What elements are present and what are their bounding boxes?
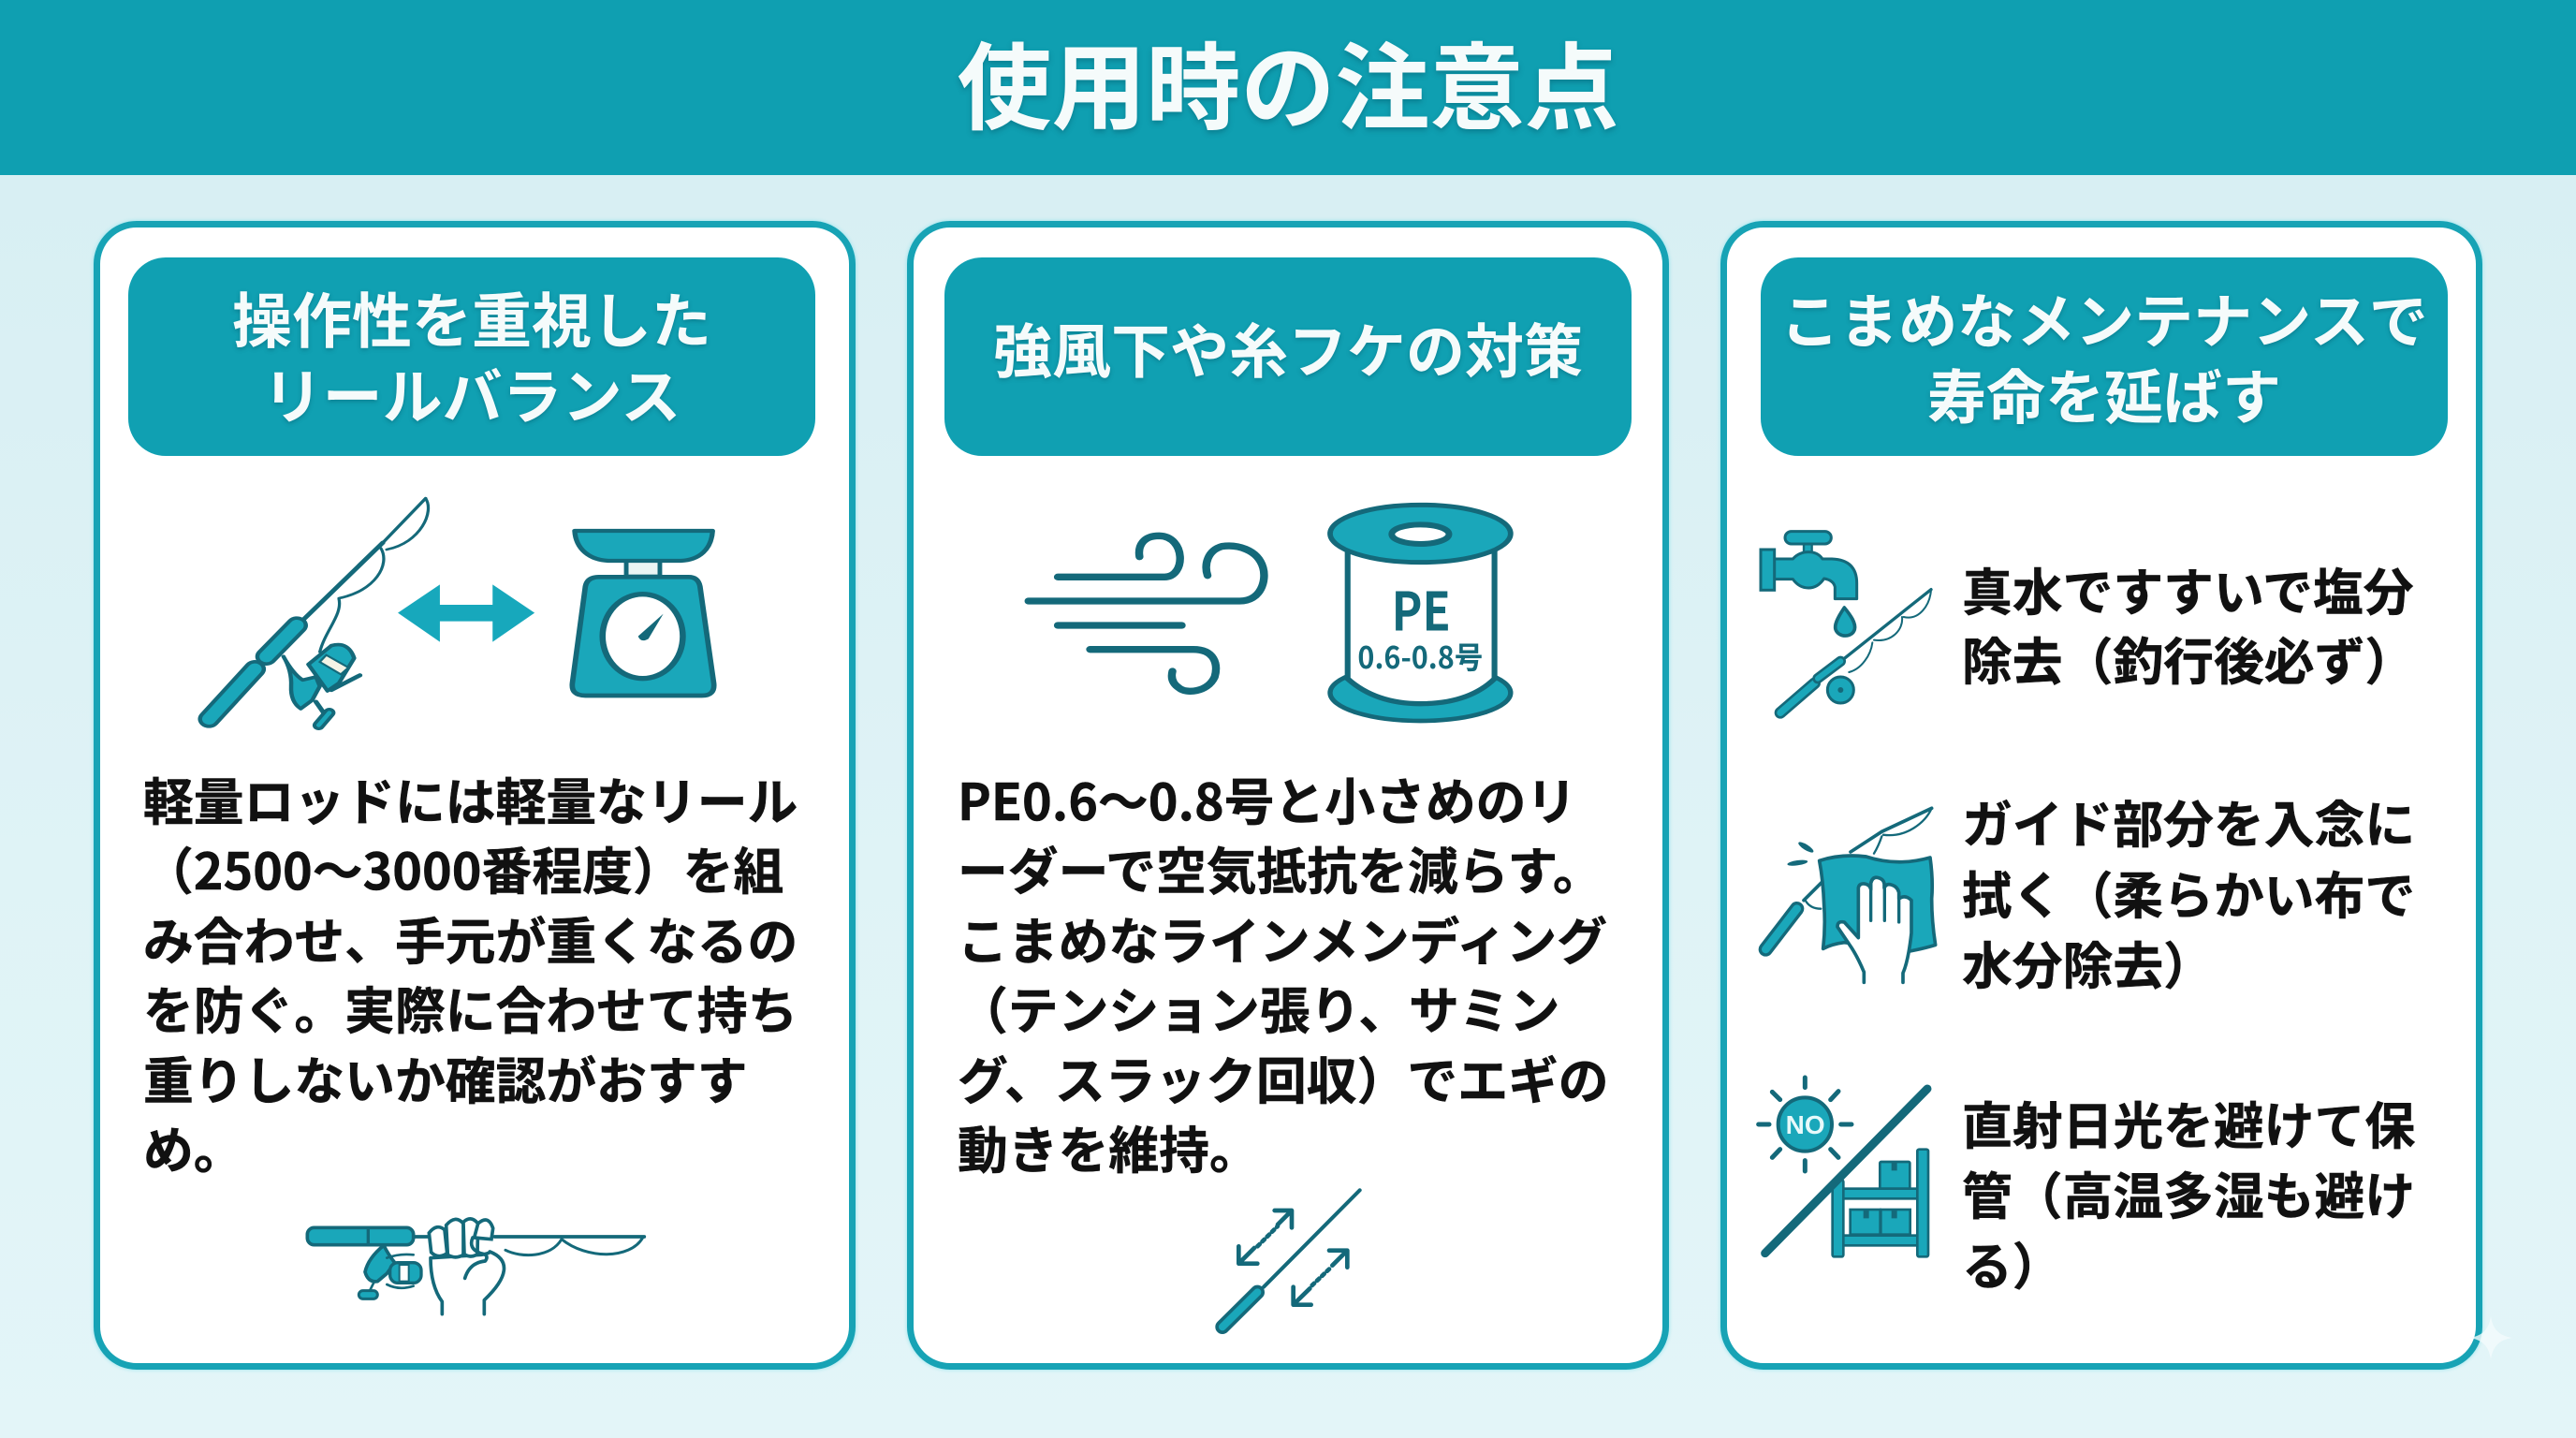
heading: wind and slack (944, 257, 1632, 456)
arrow: two-way balance (398, 584, 535, 642)
text: reel balance advice: （2500〜3000番程度）を組 (143, 832, 783, 904)
text: rinse with fresh water: 真水ですすいで塩分 (1962, 553, 2414, 625)
text: avoid direct sunlight: 直射日光を避けて保 (1962, 1087, 2415, 1159)
text: avoid direct sunlight: る） (1962, 1227, 2063, 1299)
title banner (0, 0, 2576, 175)
heading: reel balance (128, 257, 815, 456)
text: reel balance advice: を防ぐ。実際に合わせて持ち (143, 972, 798, 1044)
icon: weighing scale (569, 528, 717, 698)
icon: no direct sunlight storage shelf (1756, 1075, 1932, 1258)
icon: PE line spool: 0.6-0.8号 (1357, 634, 1483, 678)
icon: wind (1024, 532, 1268, 695)
heading: wind and slack: 強風下や糸フケの対策 (993, 305, 1583, 389)
text: reel balance advice: め。 (143, 1111, 244, 1183)
text: wind and slack advice: こまめなラインメンディング (958, 902, 1607, 975)
icon: no direct sunlight storage shelf: NO (1786, 1110, 1825, 1139)
text: reel balance advice: 重りしないか確認がおすす (143, 1042, 748, 1114)
panel: wind and slack card (907, 221, 1669, 1370)
icon: hand holding rod (305, 1217, 646, 1316)
heading: reel balance: 操作性を重視した (232, 274, 711, 360)
panel: reel balance card (94, 221, 856, 1370)
heading: maintenance: こまめなメンテナンスで (1780, 275, 2428, 360)
text: wipe guides carefully (1962, 785, 2415, 999)
title: 使用時の注意点 (957, 13, 1619, 150)
icon: faucet and rod rinse (1760, 530, 1933, 719)
text: rinse with fresh water (1962, 553, 2415, 695)
icon: fishing rod with reel (198, 496, 431, 730)
text: wipe guides carefully: 水分除去） (1962, 927, 2214, 999)
panel: maintenance card (1720, 221, 2482, 1370)
text: wind and slack advice: 動きを維持。 (958, 1111, 1260, 1183)
text: wind and slack advice: （テンション張り、サミン (958, 972, 1559, 1044)
icon: rod with air resistance arrows (1215, 1188, 1362, 1334)
heading: reel balance: リールバランス (263, 350, 681, 436)
text: reel balance advice: 軽量ロッドには軽量なリール (143, 763, 798, 835)
icon: sparkle watermark (2471, 1318, 2510, 1357)
text: rinse with fresh water: 除去（釣行後必ず） (1962, 623, 2415, 695)
icon: PE line spool (1327, 502, 1514, 723)
text: wind and slack advice: PE0.6〜0.8号と小さめのリ (958, 763, 1576, 835)
text: avoid direct sunlight: 管（高温多湿も避け (1962, 1157, 2415, 1229)
heading: maintenance (1761, 257, 2448, 456)
text: reel balance advice: み合わせ、手元が重くなるの (143, 902, 798, 975)
text: avoid direct sunlight (1962, 1087, 2415, 1299)
text: wind and slack advice (958, 763, 1609, 1183)
icon: wiping guides with cloth (1758, 806, 1938, 985)
text: wind and slack advice: ーダーで空気抵抗を減らす。 (958, 832, 1603, 904)
text: wind and slack advice: グ、スラック回収）でエギの (958, 1042, 1609, 1114)
heading: maintenance: 寿命を延ばす (1927, 351, 2281, 436)
text: wipe guides carefully: ガイド部分を入念に (1962, 785, 2415, 858)
text: wipe guides carefully: 拭く（柔らかい布で (1962, 856, 2415, 929)
icon: PE line spool: PE (1391, 568, 1451, 646)
text: reel balance advice (143, 763, 798, 1183)
